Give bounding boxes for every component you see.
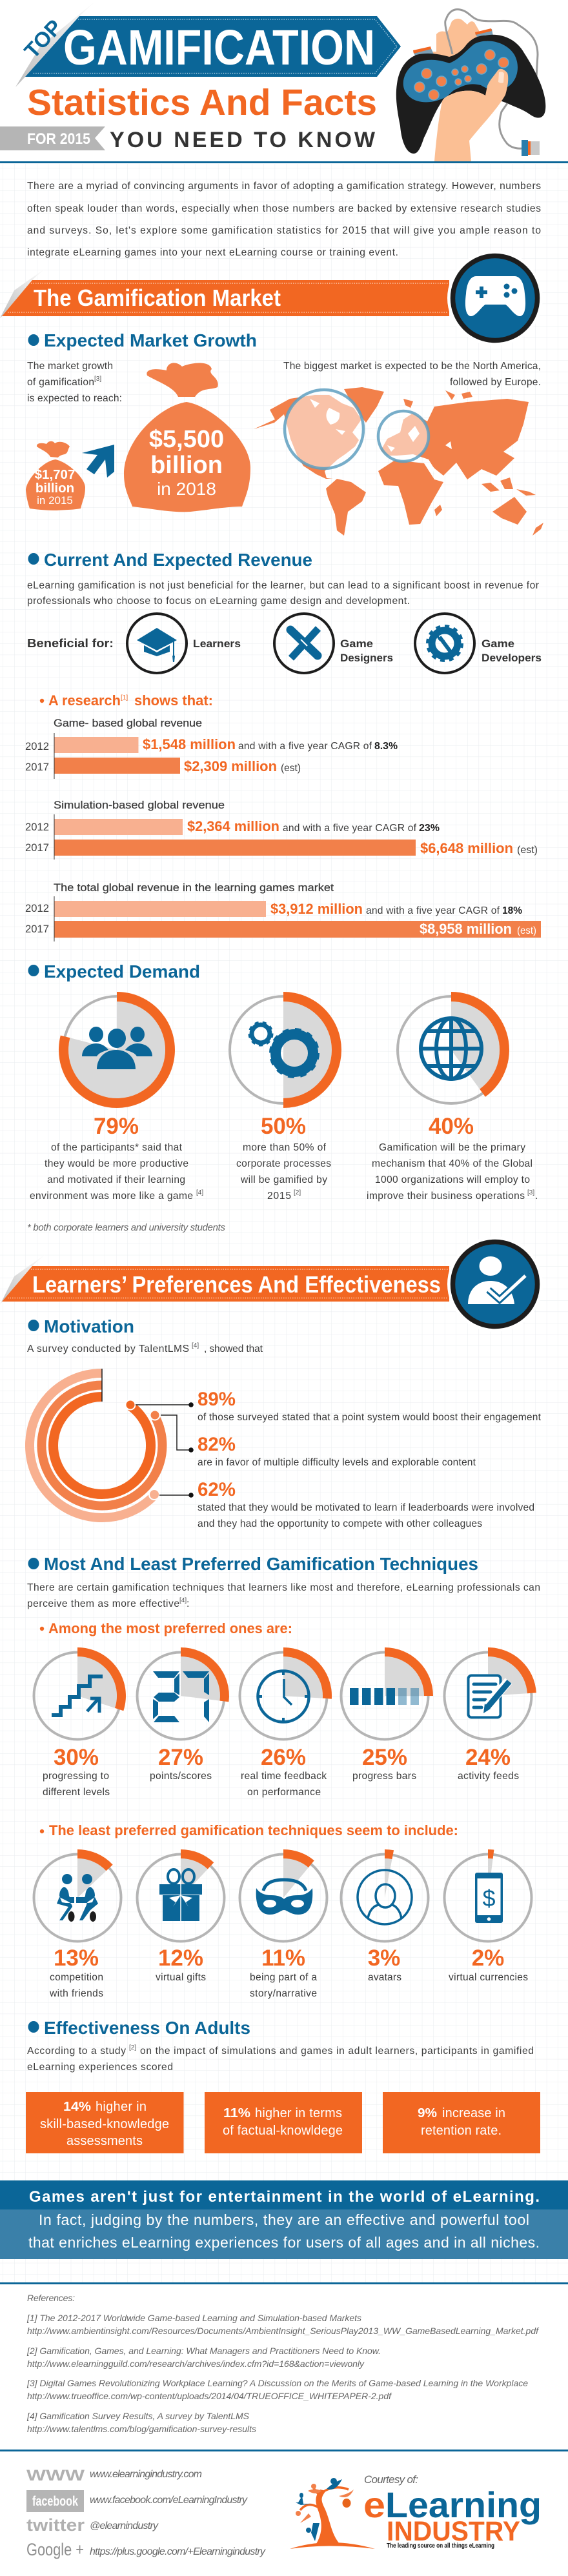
- donut: progressing to levels: [34, 1647, 126, 1740]
- label: 25 percent: progress bars: [352, 1771, 416, 1782]
- icon: game designers: [274, 614, 393, 673]
- logo: elearning industry: e: [363, 2484, 385, 2525]
- icon: globe: [421, 1018, 482, 1079]
- text: techniques intro: [4]: [179, 1597, 187, 1604]
- callout: factual knowledge: higher in terms: [255, 2106, 342, 2120]
- heading: Learners’ Preferences And Effectiveness: [32, 1271, 441, 1298]
- text: survey intro: A survey conducted by TalentLMS: [27, 1343, 189, 1354]
- stat: 82 percent: 82%: [198, 1434, 236, 1455]
- bar chart: game-based revenue: 2012: [25, 741, 49, 752]
- footer links: WWW: [26, 2467, 85, 2484]
- bar chart: simulation-based revenue: (est): [517, 845, 538, 856]
- label: 27 percent: 27%: [158, 1745, 203, 1770]
- text: revenue intro: eLearning gamification is not just beneficial for the learner, but can lead to a significant boost in revenue for: [27, 580, 539, 591]
- stat: 50 percent: more than 50% of: [243, 1142, 327, 1153]
- stat: 40 percent: [3]: [527, 1189, 534, 1196]
- stat: 40 percent: mechanism that 40% of the Global: [372, 1158, 532, 1169]
- heading: expected market growth: Expected Market Growth: [44, 330, 257, 350]
- callout: factual knowledge: [205, 2092, 362, 2153]
- footer links: Google +: [26, 2540, 84, 2559]
- subheading: a research shows: [1]: [121, 694, 128, 701]
- icon: learners: [127, 614, 241, 673]
- stat: 50 percent: [2]: [294, 1189, 301, 1196]
- icon: clock: [258, 1671, 309, 1722]
- money bag 2015: $1,707: [35, 467, 75, 482]
- text: market growth: [27, 361, 122, 404]
- label: 13 percent: with friends: [49, 1988, 103, 1999]
- conclusion band: that enriches eLearning experiences for users of all ages and in all niches.: [28, 2234, 540, 2251]
- stat: 40 percent: 1000 organizations will employ to: [375, 1174, 530, 1185]
- references: http://www.talentlms.com/blog/gamification-survey-results: [27, 2424, 256, 2434]
- callout: skill-based knowledge: 14%: [63, 2100, 91, 2114]
- world map: [254, 387, 543, 536]
- label: 2 percent: [449, 1946, 528, 1983]
- stat: 50 percent: corporate processes: [236, 1158, 331, 1169]
- callout: retention rate: 9%: [418, 2106, 437, 2120]
- subheading: most preferred: Among the most preferred ones are:: [48, 1620, 292, 1636]
- text: biggest market: [283, 361, 541, 388]
- icon: competing figures: [57, 1874, 98, 1922]
- stat: 50 percent: 2015: [267, 1191, 291, 1202]
- logo: elearning industry: The leading source on all things eLearning: [387, 2542, 494, 2550]
- subheading: least preferred: The least preferred gamification techniques seem to include:: [49, 1822, 458, 1838]
- bar chart: total revenue: (est): [517, 925, 536, 936]
- stat: 62 percent: stated that they would be motivated to learn if leaderboards were involved: [198, 1502, 534, 1513]
- label: 2 percent: 2%: [472, 1946, 504, 1971]
- text: techniques intro: There are certain gamification techniques that learners like most and therefore, eLearning professionals can: [27, 1582, 540, 1593]
- bar chart: total revenue: $3,912 million: [270, 901, 363, 917]
- intro text: integrate eLearning games into your next eLearning course or training event.: [27, 247, 398, 258]
- references: http://www.elearningguild.com/research/archives/index.cfm?id=168&action=viewonly: [27, 2359, 365, 2369]
- radial chart: motivation: [30, 1369, 194, 1518]
- bar chart: simulation-based revenue: and with a five year CAGR of: [283, 823, 417, 834]
- stat: 50 percent: [236, 1114, 331, 1202]
- bar chart: total revenue: The total global revenue in the learning games market: [54, 882, 334, 894]
- footer links: www.elearningindustry.com: [90, 2469, 202, 2480]
- icon: mask: [256, 1880, 312, 1915]
- bar chart: simulation-based revenue: [25, 800, 538, 860]
- conclusion band: Games aren't just for entertainment in the world of eLearning.: [29, 2188, 540, 2206]
- money bag 2018: billion: [150, 452, 223, 479]
- heading: The Gamification Market: [34, 285, 281, 311]
- text: study intro: [27, 2044, 534, 2073]
- bar chart: game-based revenue: $2,309 million: [184, 758, 277, 774]
- icon: game developers: [415, 614, 542, 673]
- heading: current and expected revenue: Current And Expected Revenue: [44, 550, 312, 570]
- money bag 2018: $5,500: [149, 426, 224, 453]
- callout: skill-based knowledge: [26, 2092, 183, 2153]
- icon: digits 27: [153, 1671, 209, 1722]
- icon: game developers: Developers: [482, 652, 542, 664]
- label: 26 percent: real time feedback: [241, 1771, 327, 1782]
- references: [1] The 2012-2017 Worldwide Game-based Learning and Simulation-based Markets: [26, 2313, 361, 2323]
- donut: real time feedback: [240, 1647, 332, 1740]
- label: 11 percent: story/narrative: [250, 1988, 317, 1999]
- label: 11 percent: being part of a: [250, 1972, 317, 1983]
- icon: learners: Learners: [193, 638, 241, 650]
- heading: most and least preferred: Most And Least Preferred Gamification Techniques: [44, 1554, 478, 1574]
- label: 12 percent: virtual gifts: [156, 1972, 206, 1983]
- money bag 2015: billion: [36, 481, 74, 496]
- text: techniques intro: [27, 1582, 540, 1609]
- label: 11 percent: 11%: [261, 1946, 305, 1971]
- title word gamification: GAMIFICATION: [63, 20, 375, 75]
- icon: progress bar: [350, 1688, 419, 1705]
- bar chart: game-based revenue: $1,548 million: [143, 736, 236, 752]
- subheading: a research shows: A research: [48, 692, 121, 709]
- money bag 2018: [124, 363, 250, 512]
- section banner: learners preferences: [0, 1254, 449, 1305]
- stat: 62 percent: 62%: [198, 1479, 236, 1500]
- heading: expected demand: Expected Demand: [44, 961, 200, 981]
- bar chart: game-based revenue: and with a five year CAGR of: [238, 741, 372, 752]
- bar chart: game-based revenue: 8.3%: [374, 741, 398, 752]
- bar chart: total revenue: and with a five year CAGR of: [366, 905, 500, 916]
- stat: 50 percent: will be gamified by: [240, 1174, 327, 1185]
- label: 30 percent: 30%: [54, 1745, 99, 1770]
- references: [3] Digital Games Revolutionizing Workplace Learning? A Discussion on the Merits of Game-based Learning in the Workplace: [26, 2378, 528, 2388]
- icon: game controller held in hand: [396, 10, 545, 161]
- footer links: www.facebook.com/eLearningIndustry: [90, 2495, 248, 2506]
- tag for 2015: [0, 126, 105, 150]
- stat: 79 percent: and motivated if their learning: [47, 1174, 185, 1185]
- title statistics and facts: Statistics And Facts: [27, 82, 377, 123]
- label: 25 percent: [352, 1745, 416, 1782]
- logo: elearning industry: INDUSTRY: [387, 2516, 520, 2547]
- divider: [0, 161, 568, 163]
- text: study intro: [2]: [129, 2044, 136, 2051]
- donut: competition: [34, 1849, 121, 1941]
- label: 13 percent: 13%: [54, 1946, 99, 1971]
- callout: skill-based knowledge: assessments: [66, 2134, 143, 2148]
- text: market growth: The market growth: [27, 361, 113, 372]
- stat: 79 percent: [30, 1114, 203, 1202]
- header title: FOR 2015: [27, 130, 90, 148]
- text: survey intro: [27, 1342, 263, 1354]
- label: 12 percent: 12%: [158, 1946, 203, 1971]
- label: 24 percent: [458, 1745, 519, 1782]
- bar chart: simulation-based revenue: 2017: [25, 842, 49, 854]
- bar chart: simulation-based revenue: 2012: [25, 821, 49, 833]
- label: 3 percent: [368, 1946, 401, 1983]
- icon: phone with dollar: [475, 1873, 503, 1923]
- text: study intro: According to a study: [27, 2046, 126, 2057]
- icon: gift: [159, 1869, 202, 1921]
- donut: virtual currencies: [444, 1849, 532, 1941]
- stat: 79 percent: [4]: [196, 1189, 203, 1196]
- heading: motivation: Motivation: [44, 1316, 134, 1336]
- header title: [0, 0, 401, 152]
- title word top: TOP: [19, 15, 66, 63]
- references: [4] Gamification Survey Results, A survey by TalentLMS: [26, 2411, 250, 2421]
- heading: effectiveness on adults: Effectiveness On Adults: [44, 2018, 250, 2038]
- logo: elearning industry: Learning: [385, 2484, 542, 2525]
- icon: stairs: [52, 1676, 103, 1715]
- stat: 40 percent: [367, 1114, 538, 1202]
- donut: 50 percent: [230, 992, 341, 1108]
- subheading: a research shows: [40, 692, 213, 709]
- arrow: growth: [82, 445, 114, 478]
- stat: 89 percent: 89%: [198, 1389, 236, 1410]
- text: biggest market: The biggest market is expected to be the North America,: [283, 361, 541, 372]
- icon: gears: [250, 1023, 317, 1076]
- conclusion band: [0, 2180, 568, 2259]
- callout: retention rate: retention rate.: [421, 2124, 502, 2138]
- text: techniques intro: perceive them as more effective: [27, 1598, 179, 1609]
- donut: avatars: [341, 1849, 429, 1941]
- stat: 62 percent: and they had the opportunity to compete with other colleagues: [198, 1518, 482, 1529]
- icon: tree: [290, 2478, 375, 2549]
- stat: 50 percent: 50%: [261, 1114, 306, 1139]
- stat: 40 percent: 40%: [429, 1114, 474, 1139]
- intro text: [27, 181, 541, 258]
- stat: 40 percent: Gamification will be the primary: [379, 1142, 525, 1153]
- donut: activity feeds: [444, 1647, 536, 1740]
- bar chart: game-based revenue: (est): [281, 763, 301, 774]
- label: 24 percent: activity feeds: [458, 1771, 519, 1782]
- icon: notepad and pencil: [469, 1675, 509, 1718]
- references: http://www.ambientinsight.com/Resources/Documents/AmbientInsight_SeriousPlay2013_WW_GameBasedLearning_Market.pdf: [27, 2326, 540, 2336]
- bar chart: simulation-based revenue: $6,648 million: [420, 840, 513, 856]
- callout: retention rate: [383, 2092, 540, 2153]
- label: 2 percent: virtual currencies: [449, 1972, 528, 1983]
- stat: 89 percent: [198, 1389, 542, 1423]
- bar chart: game-based revenue: Game- based global revenue: [54, 718, 202, 729]
- subheading: a research shows: shows that:: [134, 692, 213, 709]
- bar chart: simulation-based revenue: 23%: [419, 823, 440, 834]
- text: biggest market: followed by Europe.: [450, 377, 541, 388]
- bar chart: total revenue: 18%: [502, 905, 522, 916]
- callout: skill-based knowledge: skill-based-knowledge: [40, 2117, 169, 2131]
- callout: retention rate: increase in: [442, 2106, 505, 2120]
- divider: [0, 2450, 568, 2451]
- money bag 2015: [26, 441, 85, 510]
- stat: 89 percent: of those surveyed stated that a point system would boost their engagement: [198, 1412, 542, 1423]
- text: market growth: [3]: [94, 376, 101, 383]
- icon: learner badge: [447, 1236, 543, 1332]
- text: study intro: on the impact of simulations and games in adult learners, participants in gamified: [140, 2046, 534, 2057]
- label: 13 percent: competition: [50, 1972, 103, 1983]
- references: [2] Gamification, Games, and Learning: What Managers and Practitioners Need to Know.: [26, 2346, 381, 2356]
- label: 11 percent: [250, 1946, 317, 1999]
- section banner: the gamification market: [0, 268, 449, 318]
- footnote: * both corporate learners and university students: [27, 1222, 226, 1233]
- text: study intro: eLearning experiences scored: [27, 2062, 173, 2073]
- icon: avatar: [358, 1870, 412, 1924]
- stat: 79 percent: of the participants* said that: [51, 1142, 183, 1153]
- label: 3 percent: avatars: [368, 1972, 401, 1983]
- footer links: facebook: [32, 2494, 78, 2509]
- logo: elearning industry: [290, 2473, 542, 2550]
- references: http://www.trueoffice.com/wp-content/uploads/2014/04/TRUEOFFICE_WHITEPAPER-2.pdf: [27, 2391, 392, 2401]
- highlight circle: europe: [378, 411, 429, 461]
- label: 24 percent: 24%: [465, 1745, 511, 1770]
- callout: skill-based knowledge: higher in: [96, 2100, 147, 2114]
- intro text: often speak louder than words, especially when those numbers are backed by extensive research studies: [27, 203, 541, 214]
- conclusion band: In fact, judging by the numbers, they are an effective and powerful tool: [39, 2211, 529, 2228]
- text: survey intro: , showed that: [204, 1343, 263, 1354]
- title banner: [25, 16, 401, 77]
- label: 30 percent: progressing to: [43, 1771, 109, 1782]
- callout: factual knowledge: of factual-knowldege: [223, 2124, 343, 2138]
- text: market growth: of gamification: [27, 377, 94, 388]
- stat: 62 percent: [198, 1479, 534, 1529]
- footer links: @elearnindustry: [90, 2521, 159, 2531]
- icon: phone with dollar: $: [482, 1885, 496, 1911]
- donut: 79 percent: [59, 992, 175, 1108]
- footer links: twitter: [26, 2515, 85, 2535]
- logo: elearning industry: Courtesy of:: [364, 2473, 418, 2486]
- bar chart: total revenue: 2012: [25, 903, 49, 914]
- icon: gamepad badge: [447, 250, 543, 346]
- footer links: https://plus.google.com/+Elearningindustry: [90, 2546, 266, 2557]
- label: 26 percent: 26%: [261, 1745, 306, 1770]
- bar chart: game-based revenue: [25, 718, 398, 779]
- label: beneficial for: Beneficial for:: [27, 637, 114, 650]
- label: 26 percent: on performance: [247, 1787, 321, 1798]
- icon: game designers: Designers: [340, 652, 393, 664]
- bar chart: total revenue: 2017: [25, 923, 49, 935]
- icon: people: [82, 1027, 152, 1069]
- bar chart: simulation-based revenue: $2,364 million: [187, 818, 279, 834]
- text: techniques intro: :: [187, 1598, 189, 1609]
- text: revenue intro: professionals who choose to focus on eLearning game design and development.: [27, 596, 410, 607]
- donut: 40 percent: [398, 992, 509, 1103]
- bar chart: game-based revenue: 2017: [25, 761, 49, 773]
- label: 30 percent: [43, 1745, 110, 1798]
- donut: points and scores: [137, 1647, 229, 1740]
- donut: story narrative: [240, 1849, 327, 1941]
- footer links: [26, 2467, 266, 2559]
- donut: progress bars: [341, 1647, 433, 1740]
- label: 3 percent: 3%: [368, 1946, 400, 1971]
- label: 25 percent: 25%: [362, 1745, 407, 1770]
- stat: 79 percent: environment was more like a game: [30, 1191, 193, 1202]
- stat: 79 percent: they would be more productive: [45, 1158, 188, 1169]
- stat: 82 percent: [198, 1434, 476, 1468]
- stat: 40 percent: .: [535, 1191, 538, 1202]
- bar chart: total revenue: $8,958 million: [420, 921, 512, 937]
- callout: factual knowledge: 11%: [223, 2106, 250, 2120]
- map inland seas: [310, 399, 452, 479]
- money bag 2015: in 2015: [37, 494, 73, 507]
- money bag 2018: in 2018: [157, 479, 216, 499]
- label: 27 percent: [150, 1745, 212, 1782]
- stat: 40 percent: improve their business operations: [367, 1191, 525, 1202]
- text: survey intro: [4]: [192, 1342, 199, 1349]
- intro text: There are a myriad of convincing arguments in favor of adopting a gamification strategy. However, numbers: [27, 181, 541, 192]
- title you need to know: YOU NEED TO KNOW: [110, 128, 376, 152]
- label: 12 percent: [156, 1946, 206, 1983]
- text: revenue intro: [27, 580, 539, 607]
- references: References:: [27, 2293, 75, 2303]
- references: [26, 2293, 540, 2434]
- text: market growth: is expected to reach:: [27, 393, 122, 404]
- stat: 82 percent: are in favor of multiple difficulty levels and explorable content: [198, 1457, 476, 1468]
- icon: game developers: Game: [482, 638, 514, 650]
- label: 30 percent: different levels: [43, 1787, 110, 1798]
- bar chart: simulation-based revenue: Simulation-based global revenue: [54, 800, 225, 811]
- highlight circle: north america: [285, 390, 363, 468]
- label: 13 percent: [49, 1946, 103, 1999]
- label: 26 percent: [241, 1745, 327, 1798]
- intro text: and surveys. So, let's explore some gamification statistics for 2015 that will give you ample reason to: [27, 225, 541, 236]
- label: 27 percent: points/scores: [150, 1771, 212, 1782]
- stat: 79 percent: 79%: [94, 1114, 139, 1139]
- donut: virtual gifts: [137, 1849, 225, 1941]
- bar chart: total revenue: [25, 882, 541, 941]
- divider: [0, 2282, 568, 2284]
- icon: game designers: Game: [340, 638, 373, 650]
